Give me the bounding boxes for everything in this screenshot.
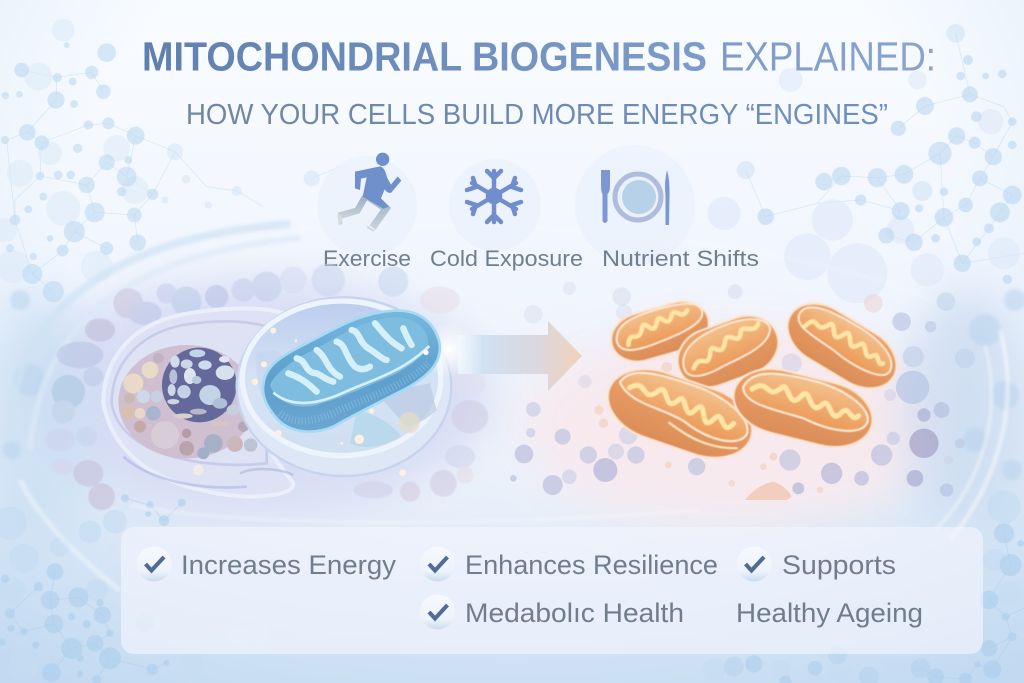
icon: runner [337,153,401,232]
subtitle: HOW YOUR CELLS BUILD MORE ENERGY “ENGINES” [186,99,888,131]
mitochondrion: orange 2 [669,306,787,397]
icon: plate [615,174,661,220]
arrow [458,321,582,391]
trigger: exercise [317,153,417,256]
icon: knife [665,170,670,225]
side bubbles [3,289,1024,480]
trigger: cold exposure [449,159,541,251]
trigger labels: Cold Exposure [430,246,583,271]
benefit: supports: Supports [782,550,896,580]
benefit: increases energy: Increases Energy [181,550,397,580]
title: MITOCHONDRIAL BIOGENESIS [142,34,707,80]
trigger labels [323,246,759,271]
icon: snowflake [467,171,521,222]
trigger labels: Nutrient Shifts [602,246,759,271]
title: EXPLAINED: [720,34,936,80]
petri dish: mitochondrion lens [193,297,451,476]
molecule network: top right [707,24,1024,303]
molecule network: bottom right [703,490,1024,683]
trigger labels: Exercise [323,246,411,271]
trigger: nutrient shifts [575,145,695,265]
mitochondrion: orange 5 [726,360,880,456]
benefit: enhances resilience: Enhances Resilience [465,550,718,580]
check: enhances resilience [420,546,455,582]
background droplets right [510,282,975,500]
mitochondrion: blue [263,311,477,432]
icon: fork [601,170,610,223]
mitochondrion: orange 3 [776,291,908,401]
check: metabolic health [420,594,455,630]
benefit: healthy ageing: Healthy Ageing [736,598,923,628]
cell organelles background [45,263,488,510]
cell membrane rings [10,224,1008,590]
mitochondrion: orange 4 [598,357,762,470]
molecule network: top left [0,19,340,302]
check: supports [736,546,772,582]
benefit: medabolic health: Medabolıc Health [465,598,684,628]
check: increases energy [136,546,172,582]
molecule network: bottom left [0,494,270,683]
petri dish: nucleus [103,308,293,497]
benefits panel [121,527,983,654]
mitochondrion: orange 1 [605,295,715,368]
